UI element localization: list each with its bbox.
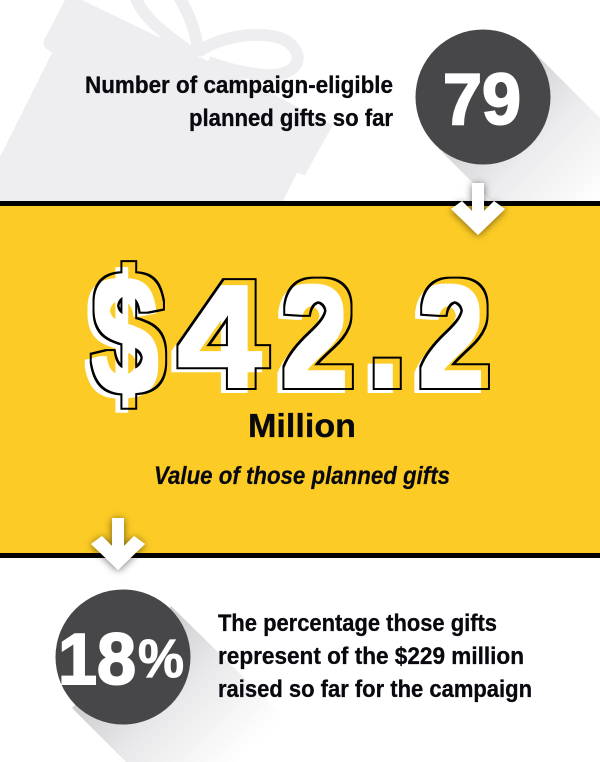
text: number of campaign-eligible gifts	[85, 72, 393, 132]
black outline layer: 2	[283, 252, 354, 417]
icon: gift box background	[0, 0, 333, 201]
white fill layer	[86, 243, 483, 434]
shadow: bottom circle long shadow	[72, 606, 330, 762]
white fill layer: $	[86, 243, 157, 434]
white fill layer: .	[362, 249, 399, 424]
white fill layer: 4	[172, 257, 260, 422]
arrow: from 79 into band	[451, 183, 505, 235]
text: percentage description: The percentage those gifts	[218, 610, 497, 637]
text: number of campaign-eligible gifts: planned gifts so far	[189, 105, 393, 132]
black outline layer: $	[93, 238, 164, 429]
text: percentage description	[218, 610, 532, 703]
stat circle: 18%: 18	[58, 620, 136, 700]
black outline layer: .	[368, 244, 406, 419]
text: value of those planned gifts: Value of those planned gifts	[154, 462, 450, 490]
arrow: from band to 18%	[91, 518, 145, 570]
big number: $42.2	[86, 238, 490, 434]
text: Million: Million	[248, 407, 356, 444]
panel: yellow band	[0, 201, 600, 558]
stat circle: 18%: %	[138, 629, 184, 689]
stat circle: 79	[416, 30, 550, 164]
stat circle: 79: 79	[443, 60, 521, 140]
text: number of campaign-eligible gifts: Number of campaign-eligible	[85, 72, 393, 99]
text: percentage description: represent of the $229 million	[218, 643, 524, 670]
stat circle: 18%	[56, 590, 190, 724]
shadow: top circle long shadow	[438, 46, 600, 201]
black outline layer: 4	[179, 252, 267, 417]
white fill layer: 2	[413, 257, 483, 422]
black outline layer	[93, 238, 490, 429]
black outline layer: 2	[420, 252, 490, 417]
white fill layer: 2	[276, 257, 347, 422]
text: percentage description: raised so far for the campaign	[218, 676, 532, 703]
